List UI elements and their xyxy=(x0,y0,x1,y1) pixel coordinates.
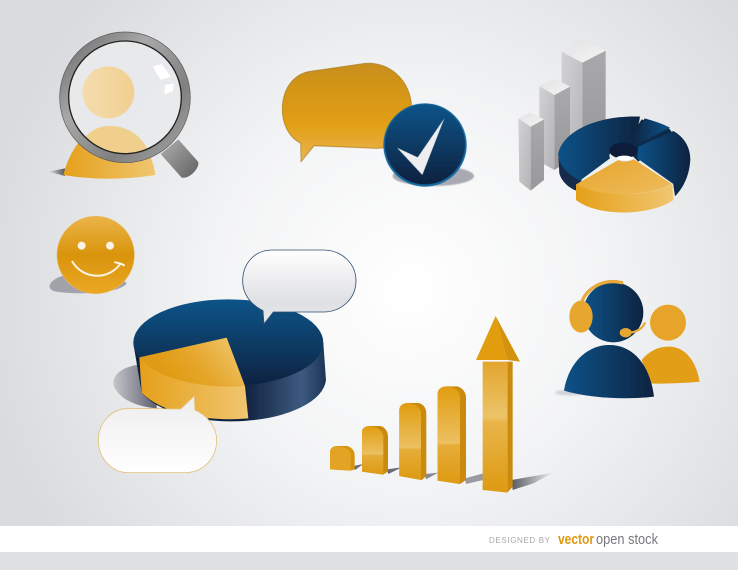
smiley shadow xyxy=(50,276,127,293)
check badge shadow xyxy=(393,166,474,186)
ground shadow xyxy=(555,390,585,395)
footer band xyxy=(0,526,738,570)
bar shadows xyxy=(353,464,553,490)
agent head xyxy=(583,282,643,342)
footer credit: open stock xyxy=(596,532,659,548)
smiley disc xyxy=(57,216,134,294)
footer credit xyxy=(489,532,659,548)
footer credit: DESIGNED BY xyxy=(489,536,551,545)
white bubble, top right xyxy=(243,250,356,324)
icon: grey bars and pie xyxy=(518,39,690,212)
user body through lens xyxy=(81,126,149,155)
slice gap backing xyxy=(623,119,673,162)
lens glare xyxy=(153,64,171,80)
blue left slice xyxy=(558,117,640,181)
smiley eyes xyxy=(78,242,114,250)
lens xyxy=(68,41,182,154)
blue right slice xyxy=(637,131,690,196)
centre hole xyxy=(609,143,637,159)
gold slice top xyxy=(576,159,672,194)
icon: speech bubble with check mark xyxy=(282,63,474,187)
bar 1 xyxy=(330,446,355,471)
pie shadow xyxy=(113,365,157,408)
blue small slice xyxy=(630,118,670,144)
short grey bar xyxy=(518,113,544,191)
tall grey bar xyxy=(562,39,606,173)
white bubble, bottom left xyxy=(98,396,217,473)
bar 2 xyxy=(362,426,388,475)
medium grey bar xyxy=(539,78,570,170)
gold wedge side xyxy=(139,357,248,419)
user shadow xyxy=(48,168,65,176)
icon: rising bars with arrow xyxy=(330,316,553,493)
smiley mouth xyxy=(72,262,124,276)
icon: magnifying glass over user xyxy=(48,32,198,179)
gold slice side xyxy=(576,184,673,212)
icon: smiley face xyxy=(50,216,134,294)
pie side wall xyxy=(133,343,326,421)
customer head xyxy=(650,305,686,341)
check mark xyxy=(397,118,444,175)
headset band xyxy=(581,282,622,305)
lens ring xyxy=(64,36,186,158)
handle xyxy=(161,139,198,178)
headset ear cup xyxy=(569,301,593,333)
footer credit: vector xyxy=(558,532,594,548)
icon: support agent with headset and customer xyxy=(555,282,700,398)
bar 4 xyxy=(438,386,466,484)
pie top xyxy=(133,299,323,386)
gold wedge top xyxy=(139,338,245,387)
user body xyxy=(63,126,155,179)
blue left slice side xyxy=(558,153,582,191)
gold speech bubble xyxy=(282,63,412,162)
bar 3 xyxy=(399,403,426,480)
big pie chart with speech bubbles xyxy=(98,250,356,473)
headset mic xyxy=(626,323,645,333)
check badge xyxy=(383,103,467,187)
arrow xyxy=(476,316,520,493)
customer body xyxy=(642,347,700,384)
agent body xyxy=(564,345,654,398)
user head xyxy=(82,66,134,118)
